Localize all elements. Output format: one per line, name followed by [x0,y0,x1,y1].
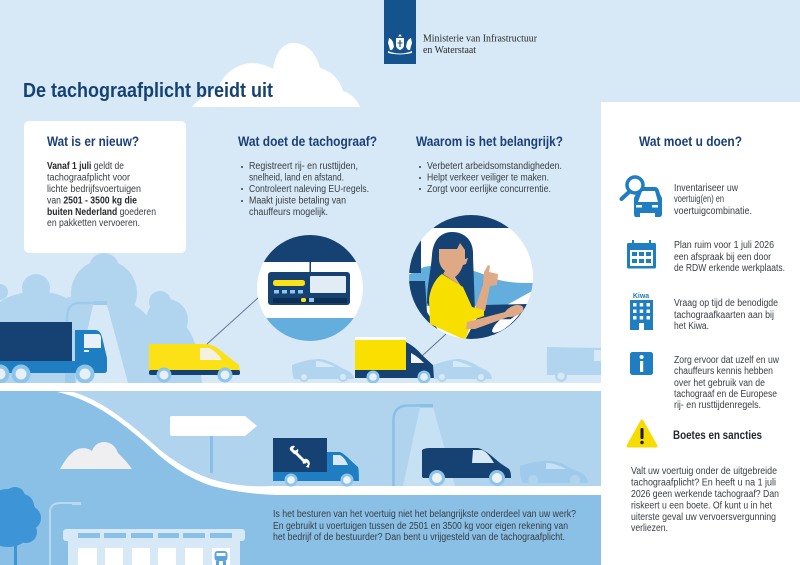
raised arm and hand [475,265,498,311]
text: vraag: tachograafkaarten aan bij [674,310,774,321]
logo: Rijksoverheid ribbon with ministry name: en Waterstaat [423,45,476,56]
tree [0,487,41,565]
panel: wat moet u doen [601,102,800,565]
body text: lichte bedrijfsvoertuigen [47,184,141,195]
panel: wat moet u doen: Wat moet u doen? [639,134,742,149]
text: boetes: verliezen. [631,523,668,534]
text: zorg: Zorg ervoor dat uzelf en uw [674,355,780,366]
bullet list: Controleert naleving EU-regels. [249,184,369,195]
panel: wat is er nieuw [24,121,186,253]
connector: delivery truck to driver [422,334,446,356]
bullet list: Verbetert arbeidsomstandigheden. [427,161,562,172]
body text [47,161,156,229]
bullet list [241,161,369,218]
panel: waarom is het belangrijk [416,134,563,195]
steering wheel [491,306,527,334]
light car lower [520,461,588,485]
text: inventariseer: voertuigcombinatie. [674,206,752,217]
text: boetes: riskeert u een boete. Of kunt u in het [631,500,772,512]
body text: van 2501 - 3500 kg die [47,196,137,206]
text: zorg: tachograaf en de Europese [674,389,777,400]
text: boetes: uiterste geval uw vervoersvergunning [631,512,776,523]
logo: Rijksoverheid ribbon with ministry name [384,0,538,64]
text: zorg: over het gebruik van de [674,378,765,389]
title: De tachograafplicht breidt uit [23,79,273,102]
bullet list: Zorgt voor eerlijke concurrentie. [427,184,551,195]
body text: en pakketten vervoeren. [47,218,140,229]
panel: waarom is het belangrijk: Waarom is het belangrijk? [416,134,563,149]
text: boetes [631,466,779,534]
icon: calendar [627,240,656,268]
repair truck [273,438,359,486]
background cars and van [292,347,601,382]
panel: wat doet de tachograaf: Wat doet de tachograaf? [238,134,377,149]
text: boetes: 2026 geen werkende tachograaf? Dan [631,489,779,500]
blue truck [0,322,107,384]
icon: Kiwa building [630,293,653,330]
logo: Rijksoverheid ribbon with ministry name: Ministerie van Infrastructuur [423,34,538,44]
bullet list: Registreert rij- en rusttijden, [249,161,358,172]
lower street lamp and beam [394,404,455,486]
icon: magnifier and car [622,177,662,217]
yellow van [149,344,240,382]
text: plan: Plan ruim voor 1 juli 2026 [674,240,774,251]
face and neck [439,243,468,286]
connector: van to tachograph [207,297,259,344]
bullet list: Maakt juiste betaling van [249,196,346,206]
road white [0,383,601,391]
body text: Vanaf 1 juli geldt de [47,161,124,172]
cab frame and seat [408,240,438,330]
text: zorg [674,355,780,411]
text: zorg: chauffeurs kennis hebben [674,366,773,377]
panel: lower landscape [0,391,601,565]
bullet list: Helpt verkeer veiliger te maken. [427,172,549,184]
heading: boetes en sancties: Boetes en sancties [673,428,762,442]
panel: wat doet de tachograaf [238,134,377,218]
text: plan [674,240,785,274]
text: vraag [674,298,778,332]
lower arm [466,305,523,329]
illustration: background trees [0,253,202,383]
delivery truck yellow and navy [355,337,435,384]
garage building [63,529,245,565]
street lamp near blue truck [65,301,128,383]
navy van [422,448,511,486]
body text: tachograafplicht voor [47,172,131,184]
text: plan: een afspraak bij een door [674,252,772,263]
text: exemption: En gebruikt u voertuigen tussen de 2501 en 3500 kg voor eigen rekening van [273,521,568,532]
icon: info [630,352,653,375]
text: vraag: het Kiwa. [674,321,709,332]
yellow shirt [429,274,484,340]
landscape through windshield [408,265,534,306]
text: inventariseer: Inventariseer uw [674,183,739,194]
bullet list: chauffeurs mogelijk. [249,207,328,218]
cloud lower [60,442,132,469]
hair [427,232,475,308]
text: inventariseer: voertuig(en) en [674,194,724,205]
tachograph circle [256,234,364,342]
panel: wat is er nieuw: Wat is er nieuw? [47,134,139,149]
text: exemption: Is het besturen van het voertuig niet het belangrijkste onderdeel van uw werk? [273,509,576,520]
driver circle [408,214,534,340]
text: exemption [273,509,576,543]
body text: buiten Nederland goederen [47,207,156,218]
icon: warning triangle [628,421,656,446]
text: exemption: het bedrijf of de bestuurder? Dan bent u vrijgesteld van de tachograafplicht. [273,532,565,543]
icon: van in garage [214,551,228,565]
icon: Kiwa building: Kiwa [633,293,649,300]
street lamp lower left [50,502,81,565]
text: boetes: tachograafplicht? En heeft u na 1 juli [631,478,776,488]
dashboard [466,304,527,339]
cloud behind title [192,43,360,107]
roof of cab [433,215,509,228]
icon: wrench [290,446,310,468]
bullet list [419,161,562,195]
text: zorg: rij- en rusttijdenregels. [674,400,761,411]
direction sign [170,416,257,473]
text: boetes: Valt uw voertuig onder de uitgebreide [631,466,777,477]
text: vraag: Vraag op tijd de benodigde [674,298,778,309]
text: inventariseer [674,183,752,217]
bullet list: snelheid, land en afstand. [249,172,344,184]
